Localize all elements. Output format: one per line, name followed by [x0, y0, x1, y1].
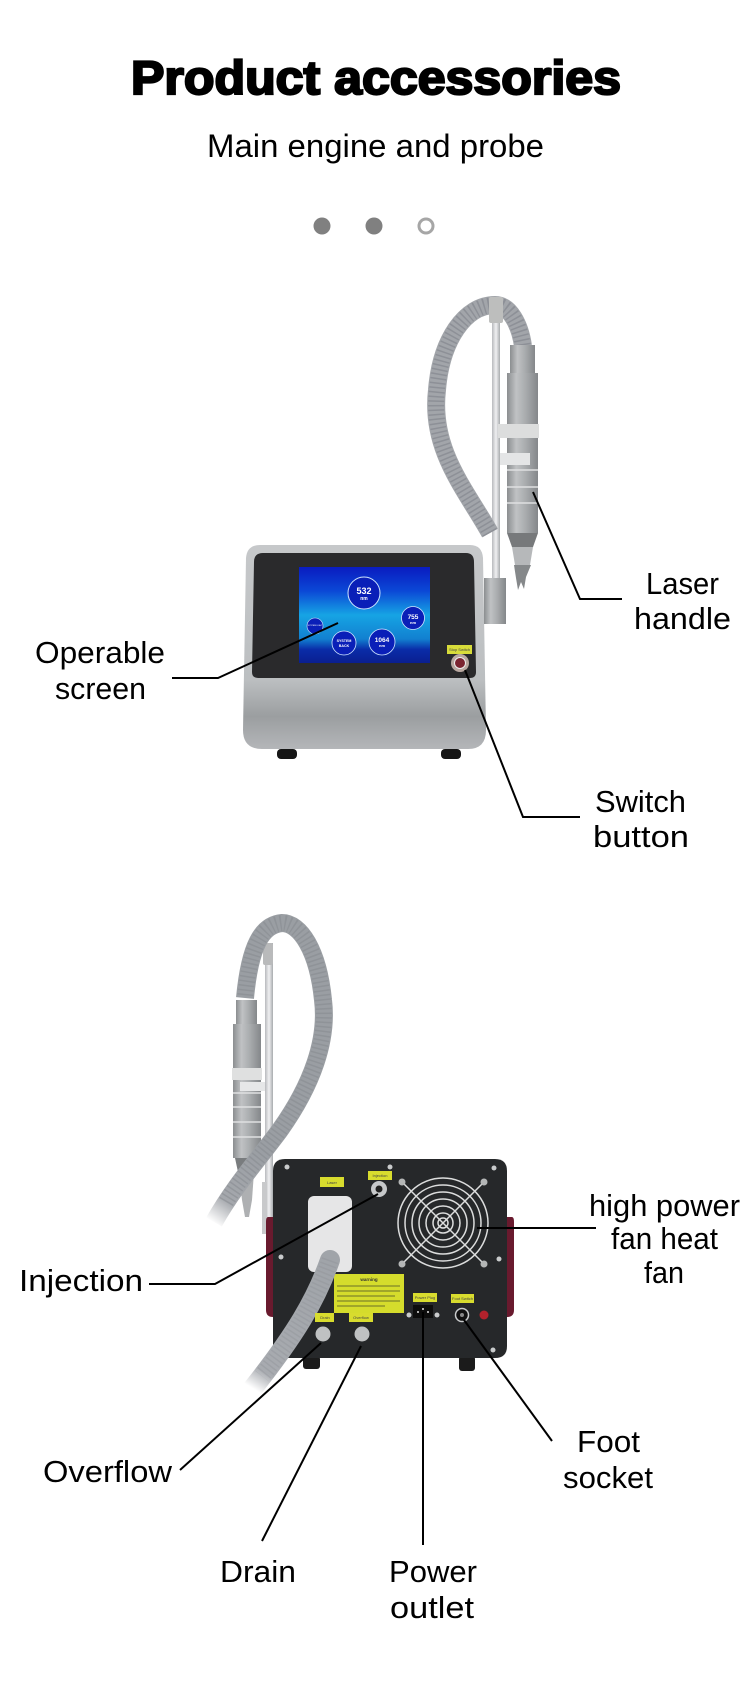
screen button 755 nm: 755 — [408, 614, 419, 621]
icon: rear laser handle — [232, 1000, 265, 1217]
callout: power outlet: outlet — [390, 1590, 474, 1625]
icon: laser label: Laser — [327, 1180, 338, 1185]
icon: power socket — [413, 1305, 433, 1318]
subtitle: Main engine and probe — [207, 128, 544, 164]
icon: screws — [278, 1164, 502, 1352]
callout: switch button: Switch — [595, 784, 686, 819]
callout: power outlet: Power — [389, 1554, 477, 1589]
callout: laser handle — [533, 492, 731, 636]
callout: high power fan heat fan: fan heat — [611, 1221, 718, 1256]
title: Product accessories — [131, 51, 621, 104]
callout: switch button: button — [593, 819, 689, 854]
switch: Stop Switch — [449, 647, 470, 652]
callout: injection: Injection — [19, 1263, 143, 1298]
callout: operable screen — [35, 623, 338, 706]
screen button left: SYSTEM LIGHT — [308, 625, 323, 627]
icon: knobs — [316, 1326, 370, 1342]
icon: support rod — [492, 323, 500, 583]
callout: injection — [19, 1194, 378, 1298]
callout: laser handle: Laser — [646, 566, 719, 601]
panel: front view device — [243, 297, 539, 759]
callout: operable screen: screen — [55, 671, 146, 706]
screen button 1064 nm: 1064 — [375, 637, 390, 644]
callout: switch button — [465, 670, 689, 854]
callout: foot socket: Foot — [577, 1424, 640, 1459]
icon: injection label: Injection — [373, 1173, 387, 1178]
power label: Power Plug — [415, 1295, 435, 1300]
screen button 532 nm — [348, 577, 380, 609]
foot label — [451, 1294, 474, 1303]
drain label — [315, 1313, 334, 1322]
screen button 532 nm: 532 — [356, 586, 372, 596]
screen button 1064 nm: nm — [379, 643, 385, 648]
screen button system back: BACK — [339, 644, 350, 648]
callout: foot socket: socket — [563, 1460, 653, 1495]
panel: rear view device — [214, 923, 514, 1388]
overflow label — [349, 1313, 373, 1322]
icon: rear support rod — [262, 943, 273, 1234]
callout: overflow — [43, 1343, 321, 1489]
callout: high power fan heat fan: high power — [589, 1188, 740, 1223]
power label — [413, 1293, 437, 1302]
screen button system back — [332, 631, 356, 655]
foot label: Foot Switch — [452, 1296, 473, 1301]
icon: corrugated hose — [436, 297, 523, 533]
warning label: warning — [359, 1277, 378, 1282]
icon: laser handle — [498, 345, 539, 590]
callout: operable screen: Operable — [35, 635, 165, 670]
callout: high power fan heat fan: fan — [644, 1255, 684, 1290]
icon: rear red side panels — [266, 1217, 514, 1317]
drain label: Drain — [320, 1315, 330, 1320]
screen button 755 nm: nm — [410, 620, 416, 625]
callout: foot socket — [464, 1320, 653, 1495]
switch — [447, 645, 472, 672]
screen button 1064 nm — [369, 629, 395, 655]
icon: machine body — [243, 545, 506, 759]
icon: laser label — [320, 1177, 344, 1187]
icon: rear feet — [303, 1356, 475, 1371]
icon: rear black body — [273, 1159, 507, 1358]
screen button system back: SYSTEM — [337, 639, 351, 643]
icon: rear hose upper — [214, 923, 324, 1222]
icon: cooling fan — [398, 1178, 488, 1268]
icon: red button — [480, 1310, 488, 1320]
callout: drain: Drain — [220, 1554, 296, 1589]
screen button 532 nm: nm — [360, 596, 368, 602]
icon: injection port — [371, 1181, 387, 1197]
callout: drain — [220, 1346, 361, 1589]
icon: hose connector module — [308, 1196, 352, 1272]
icon: injection label — [368, 1171, 392, 1180]
warning label — [334, 1274, 404, 1313]
callout: laser handle: handle — [634, 601, 731, 636]
callout: high power fan heat fan — [477, 1188, 740, 1290]
callout: power outlet — [389, 1312, 477, 1625]
callout: overflow: Overflow — [43, 1454, 173, 1489]
touch screen — [299, 567, 430, 663]
overflow label: Overflow — [353, 1315, 369, 1320]
icon: foot socket — [456, 1308, 468, 1322]
screen button 755 nm — [402, 606, 424, 630]
pagination dots — [314, 218, 433, 234]
icon: rear hose lower — [253, 1260, 330, 1388]
